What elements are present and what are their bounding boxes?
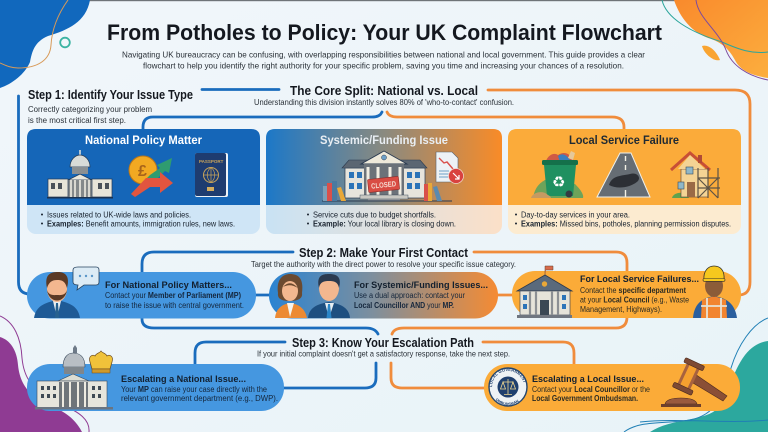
core split heading: The Core Split: National vs. Local — [290, 84, 478, 98]
card: local escalation: Contact your Local Councillor or the — [532, 385, 650, 394]
card: local contact: Contact the specific department — [580, 286, 686, 295]
icon: MP man with speech bubble — [34, 267, 99, 318]
card: systemic contact — [269, 272, 498, 318]
icon: passport — [195, 153, 228, 197]
step 1 heading: Correctly categorizing your problem — [28, 105, 152, 114]
step 3 heading: If your initial complaint doesn't get a satisfactory response, take the next step. — [257, 350, 510, 358]
card: national contact: For National Policy Matters... — [105, 280, 232, 291]
step 1 heading: is the most critical first step. — [28, 116, 126, 125]
panel: local service failure — [508, 129, 741, 234]
icon: closed library — [322, 151, 452, 201]
icon: parliament with crown — [35, 345, 113, 410]
step 3 heading — [257, 336, 510, 358]
decoration: bottom-left purple blob — [0, 316, 89, 432]
card: local contact — [512, 266, 741, 318]
title: From Potholes to Policy: Your UK Complaint Flowchart — [107, 20, 662, 45]
icon: ombudsman seal — [488, 367, 528, 407]
bullet list: Service cuts due to budget shortfalls. — [313, 210, 436, 220]
panel: local service failure: Local Service Failure — [569, 135, 679, 147]
card: local escalation: Local Government Ombudsman. — [532, 394, 638, 403]
icon: town hall — [517, 266, 572, 318]
intro text — [122, 50, 645, 70]
card: local contact: For Local Service Failures... — [580, 274, 699, 285]
bullet list — [307, 210, 456, 228]
decoration: top-right orange blob — [662, 0, 768, 80]
icon: councillor and MP — [275, 274, 350, 318]
icon: closed library: CLOSED — [371, 179, 397, 191]
icon: road with pothole — [597, 153, 650, 197]
step 1 heading — [28, 88, 193, 125]
icon: pound coin and arrows: £ — [138, 163, 147, 180]
card: systemic contact: For Systemic/Funding Issues... — [354, 280, 488, 291]
icon: overflowing recycling bin — [531, 151, 583, 198]
panel: systemic funding issue: Systemic/Funding Issue — [320, 135, 448, 147]
card: systemic contact: Local Councillor AND your MP. — [354, 301, 454, 310]
flow connectors — [18, 90, 750, 388]
card: local contact: Management, Highways). — [580, 305, 662, 314]
icon: ombudsman seal: OMBUDSMAN — [496, 398, 519, 406]
icon: passport: PASSPORT — [199, 159, 224, 164]
bullet list: Day-to-day services in your area. — [521, 210, 630, 220]
card: national escalation: relevant government department (e.g., DWP). — [121, 394, 278, 403]
icon: gavel — [661, 358, 727, 407]
step 2 heading: Target the authority with the direct power to resolve your specific issue category. — [251, 260, 516, 269]
bullet list: Example: Your local library is closing down. — [313, 220, 456, 228]
bullet list: Issues related to UK-wide laws and policies. — [47, 210, 191, 220]
card: national escalation — [27, 345, 284, 411]
core split heading: Understanding this division instantly solves 80% of 'who-to-contact' confusion. — [254, 98, 514, 107]
card: national contact: Contact your Member of Parliament (MP) — [105, 291, 241, 300]
panel: systemic funding issue — [266, 129, 502, 234]
bullet list — [515, 210, 731, 228]
bullet list: Examples: Benefit amounts, immigration rules, new laws. — [47, 220, 235, 228]
card: national escalation: Your MP can raise your case directly with the — [121, 385, 267, 394]
icon: parliament building — [47, 150, 113, 198]
decoration: top-left blue blob — [0, 0, 90, 88]
icon: construction worker — [693, 266, 737, 318]
icon: falling budget document — [436, 152, 464, 184]
card: national escalation: Escalating a National Issue... — [121, 374, 246, 385]
core split heading — [254, 84, 514, 107]
card: systemic contact: Use a dual approach: contact your — [354, 291, 465, 300]
card: local contact: at your Local Council (e.g., Waste — [580, 296, 689, 304]
icon: ombudsman seal: LOCAL GOVERNMENT — [490, 368, 526, 387]
intro text: Navigating UK bureaucracy can be confusing, with overlapping responsibilities between national and local government. This guide provides a clear — [122, 50, 645, 60]
step 3 heading: Step 3: Know Your Escalation Path — [292, 336, 474, 350]
step 1 heading: Step 1: Identify Your Issue Type — [28, 88, 193, 102]
card: local escalation: Escalating a Local Issue... — [532, 374, 644, 385]
card: national contact — [27, 267, 256, 318]
card: national contact: to raise the issue with central government. — [105, 301, 244, 310]
step 2 heading: Step 2: Make Your First Contact — [299, 246, 469, 260]
icon: pound coin and arrows — [129, 156, 173, 197]
icon: house with scaffolding — [671, 153, 720, 198]
decoration: bottom-right teal blob — [624, 318, 768, 432]
card: local escalation — [484, 358, 740, 411]
step 2 heading — [251, 246, 516, 269]
bullet list — [41, 210, 235, 228]
panel: national policy matter — [27, 129, 260, 234]
intro text: flowchart to help you identify the right authority for your specific problem, saving you time and increasing your chances of a resolution. — [143, 60, 624, 70]
bullet list: Examples: Missed bins, potholes, planning permission disputes. — [521, 220, 731, 228]
panel: national policy matter: National Policy Matter — [85, 135, 203, 147]
icon: overflowing recycling bin: ♻ — [552, 174, 565, 191]
